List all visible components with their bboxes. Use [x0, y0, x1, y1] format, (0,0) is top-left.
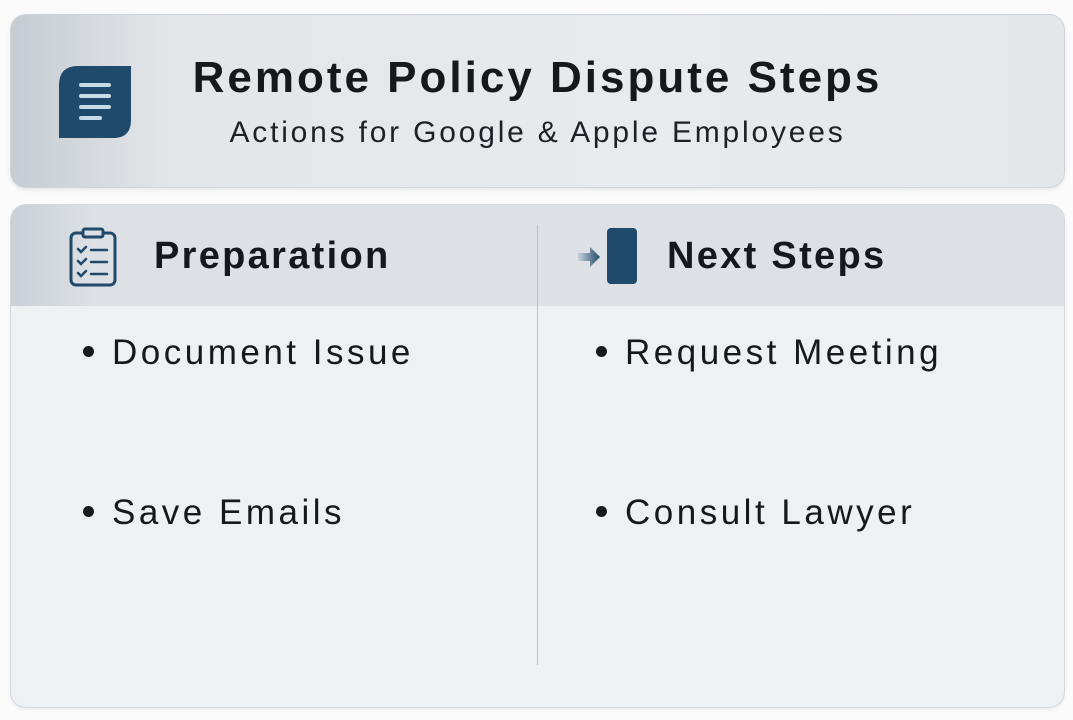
- header panel: [10, 14, 1065, 188]
- bullet: save emails: Save Emails: [112, 493, 345, 532]
- main panel: [10, 204, 1065, 708]
- icon: document: [59, 66, 131, 138]
- bullet: consult lawyer: Consult Lawyer: [625, 493, 915, 532]
- bullet: document issue: Document Issue: [112, 333, 414, 372]
- subtitle: Actions for Google & Apple Employees: [229, 116, 846, 149]
- bullet: request meeting: Request Meeting: [625, 333, 942, 372]
- column: preparation: [70, 228, 414, 532]
- column: next steps: [578, 228, 942, 532]
- icon: clipboard: [70, 228, 116, 286]
- title: Remote Policy Dispute Steps: [193, 53, 882, 102]
- icon: arrow into door: [578, 228, 637, 284]
- heading: preparation: Preparation: [154, 235, 390, 277]
- heading: next steps: Next Steps: [667, 235, 886, 277]
